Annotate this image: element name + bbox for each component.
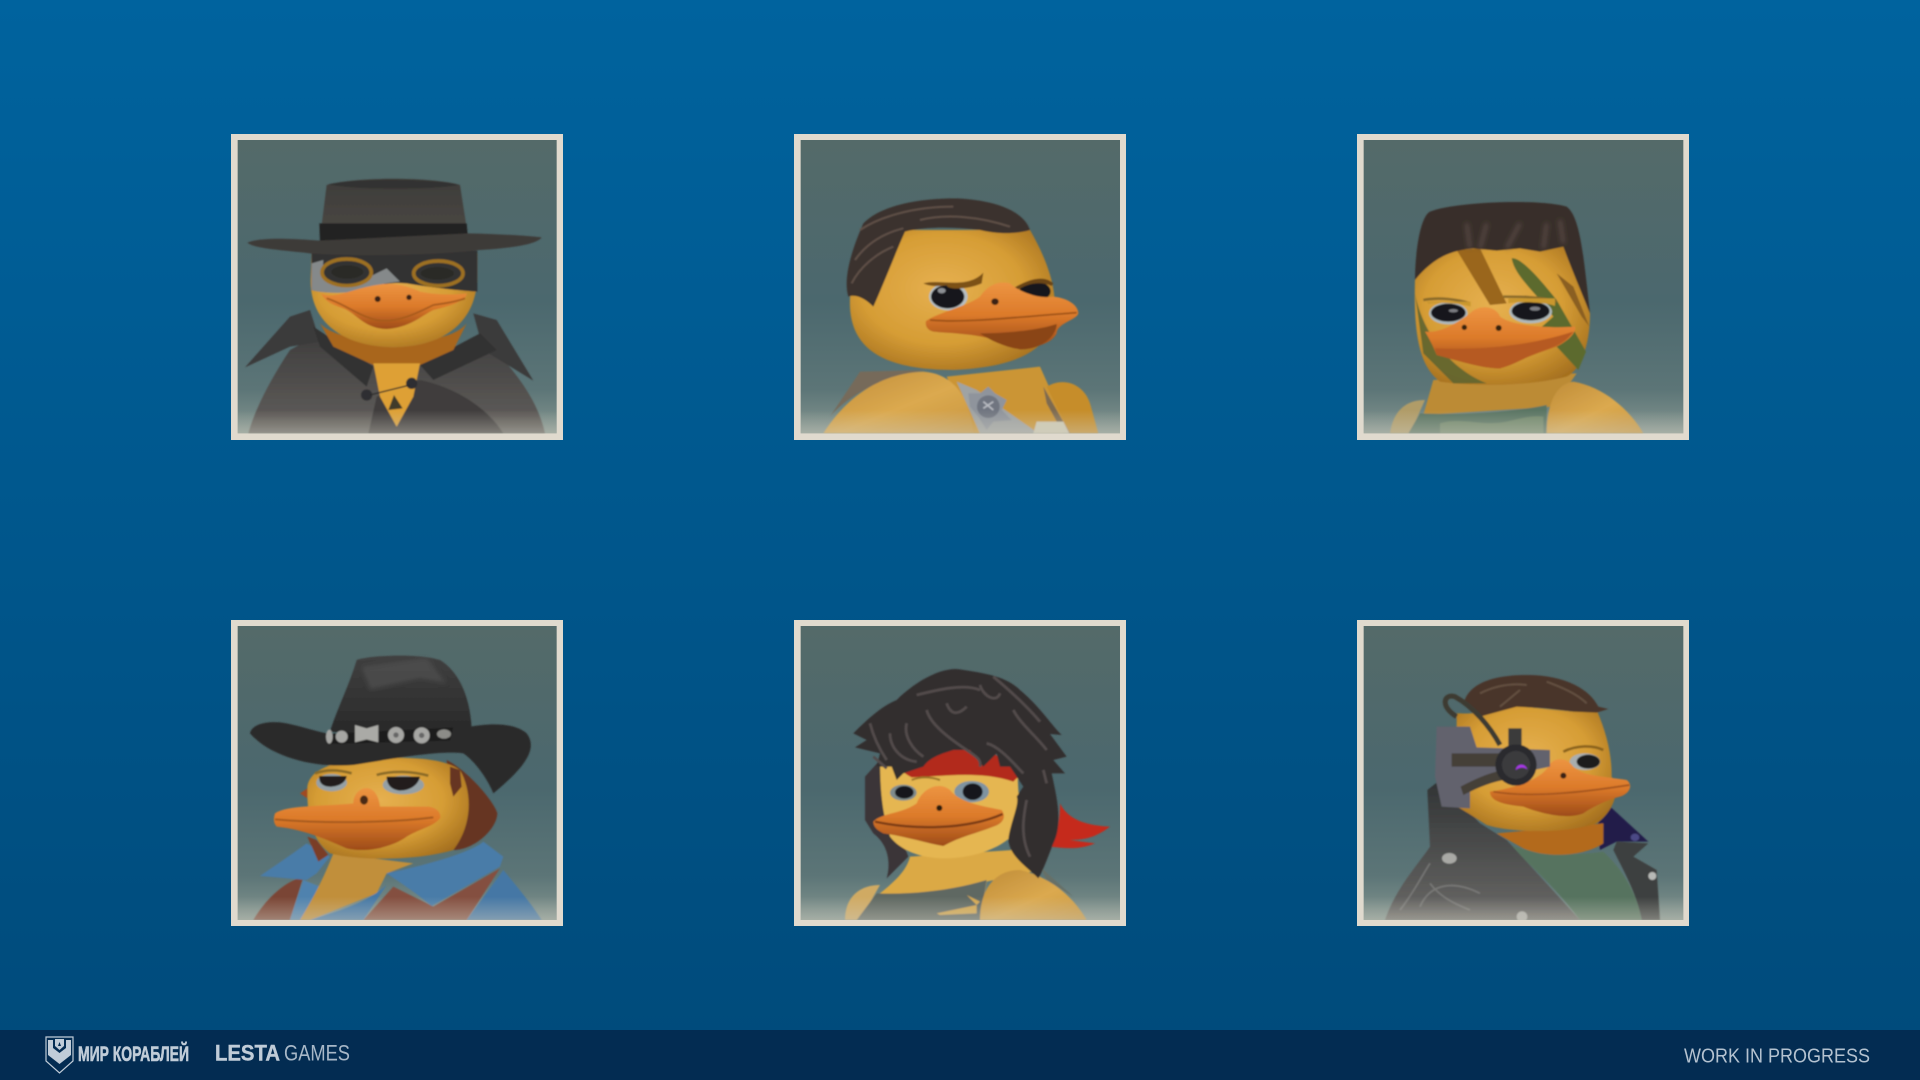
panel: cop duck with badge — [794, 134, 1126, 440]
panel: cyborg duck with eye device — [1357, 620, 1689, 926]
status label: WORK IN PROGRESS — [1684, 1046, 1870, 1068]
icon: shield logo — [46, 1037, 73, 1073]
logo text: game name: МИР КОРАБЛЕЙ — [78, 1042, 189, 1066]
portrait: scowling duck — [823, 198, 1098, 433]
logo text: publisher second word: GAMES — [284, 1040, 350, 1066]
portrait: cowboy duck — [250, 656, 542, 920]
footer bar — [0, 1030, 1920, 1080]
panel: masked duck in flat hat — [231, 134, 563, 440]
panel: camouflage-painted duck — [1357, 134, 1689, 440]
portrait: cyborg duck — [1385, 675, 1660, 922]
portrait: camouflage duck — [1390, 202, 1643, 433]
logo text: publisher: LESTA — [215, 1040, 280, 1066]
portrait: headband duck — [845, 669, 1110, 920]
portrait: masked duck — [245, 179, 545, 433]
panel: cowboy duck — [231, 620, 563, 926]
panel: long-haired duck with red headband — [794, 620, 1126, 926]
